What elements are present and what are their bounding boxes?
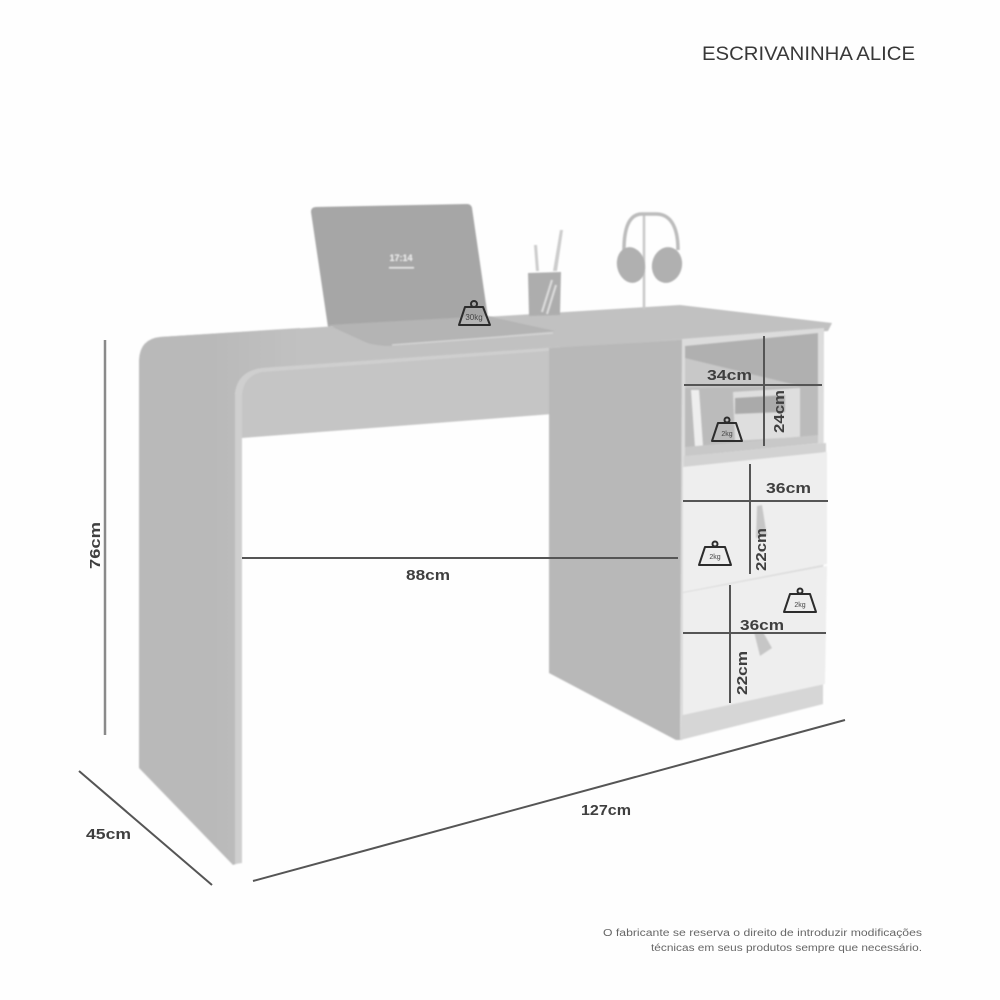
laptop <box>311 204 555 346</box>
plinth <box>680 683 823 740</box>
lower drawer front <box>683 566 827 715</box>
dimension lines <box>79 336 845 885</box>
title: ESCRIVANINHA ALICE <box>702 44 915 65</box>
dimension: 88cm: 88cm <box>406 567 450 584</box>
desk top surface <box>160 305 832 372</box>
desk <box>139 305 832 865</box>
laptop: 17:14 <box>389 253 413 263</box>
dimension: 45cm: 45cm <box>86 826 131 843</box>
dimension: 127cm: 127cm <box>581 802 631 819</box>
disclaimer note: O fabricante se reserva o direito de introduzir modificações <box>603 928 922 939</box>
upper drawer front <box>683 452 827 592</box>
underside band <box>238 339 682 438</box>
pedestal side <box>549 340 682 740</box>
pedestal front <box>680 328 824 740</box>
dimension: upper 22cm: 22cm <box>753 528 770 571</box>
icon: 2kg weight upper drawer <box>699 542 731 565</box>
pencil holder <box>528 230 563 316</box>
icon: 2kg weight upper drawer: 2kg <box>709 554 721 561</box>
dimension: lower 22cm: 22cm <box>734 651 751 695</box>
icon: 2kg weight lower drawer: 2kg <box>794 602 806 609</box>
disclaimer note: técnicas em seus produtos sempre que necessário. <box>651 943 922 954</box>
open niche <box>685 333 818 456</box>
icon: 2kg weight niche: 2kg <box>721 431 733 438</box>
dimension: 76cm: 76cm <box>87 522 104 569</box>
icon: 30kg weight: 30kg <box>465 313 483 322</box>
headphones on stand <box>614 214 685 309</box>
icon: 2kg weight lower drawer <box>784 588 816 612</box>
left leg <box>139 328 300 865</box>
icon: 30kg weight <box>459 301 490 325</box>
dimension: 34cm: 34cm <box>707 367 752 384</box>
dimension: upper 36cm: 36cm <box>766 480 811 497</box>
icon: 2kg weight niche <box>712 418 742 441</box>
drawer handles <box>754 505 772 656</box>
dimension: 24cm: 24cm <box>771 390 788 433</box>
dimension: lower 36cm: 36cm <box>740 617 784 634</box>
disclaimer note <box>603 928 922 954</box>
